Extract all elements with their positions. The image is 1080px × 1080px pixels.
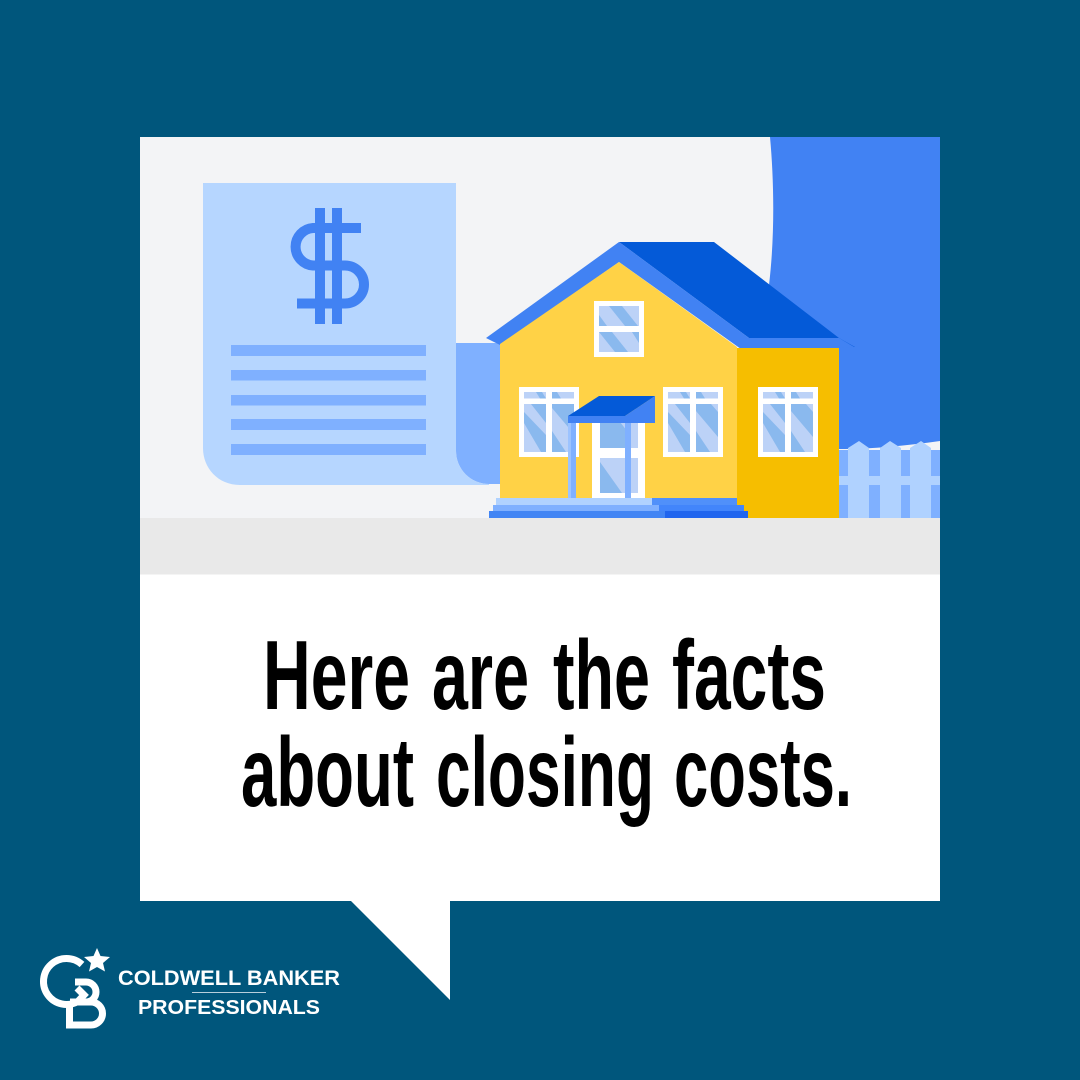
icon: CB monogram with star	[43, 948, 110, 1025]
logo text	[118, 967, 340, 1019]
heading: the	[553, 620, 650, 730]
heading: facts	[672, 620, 826, 730]
heading: are	[432, 620, 529, 730]
porch posts	[568, 423, 631, 499]
house front wall	[500, 262, 737, 518]
window: left	[519, 387, 579, 457]
paper curl	[456, 343, 505, 484]
fence	[839, 441, 940, 518]
front door	[592, 422, 645, 498]
heading: about	[241, 717, 414, 827]
logo: Coldwell Banker Professionals	[43, 948, 340, 1025]
panel: illustration scene	[140, 137, 940, 574]
tree: blue background shape	[769, 137, 940, 449]
icon: dollar sign	[296, 208, 364, 324]
heading	[241, 620, 852, 827]
front steps	[489, 498, 748, 518]
document	[203, 183, 489, 485]
window: middle	[663, 387, 723, 457]
window: attic	[594, 301, 644, 357]
house	[486, 242, 855, 518]
heading: Here	[263, 620, 410, 730]
ground strip	[140, 518, 940, 574]
house side wall	[737, 348, 839, 518]
logo text: PROFESSIONALS	[138, 996, 320, 1019]
panel: speech bubble	[140, 137, 940, 1000]
porch roof	[568, 396, 655, 423]
heading: costs.	[674, 717, 852, 827]
heading: closing	[436, 717, 654, 827]
window: side	[758, 387, 818, 457]
document text lines	[231, 345, 426, 455]
roof	[486, 242, 855, 349]
logo text: COLDWELL BANKER	[118, 967, 340, 990]
